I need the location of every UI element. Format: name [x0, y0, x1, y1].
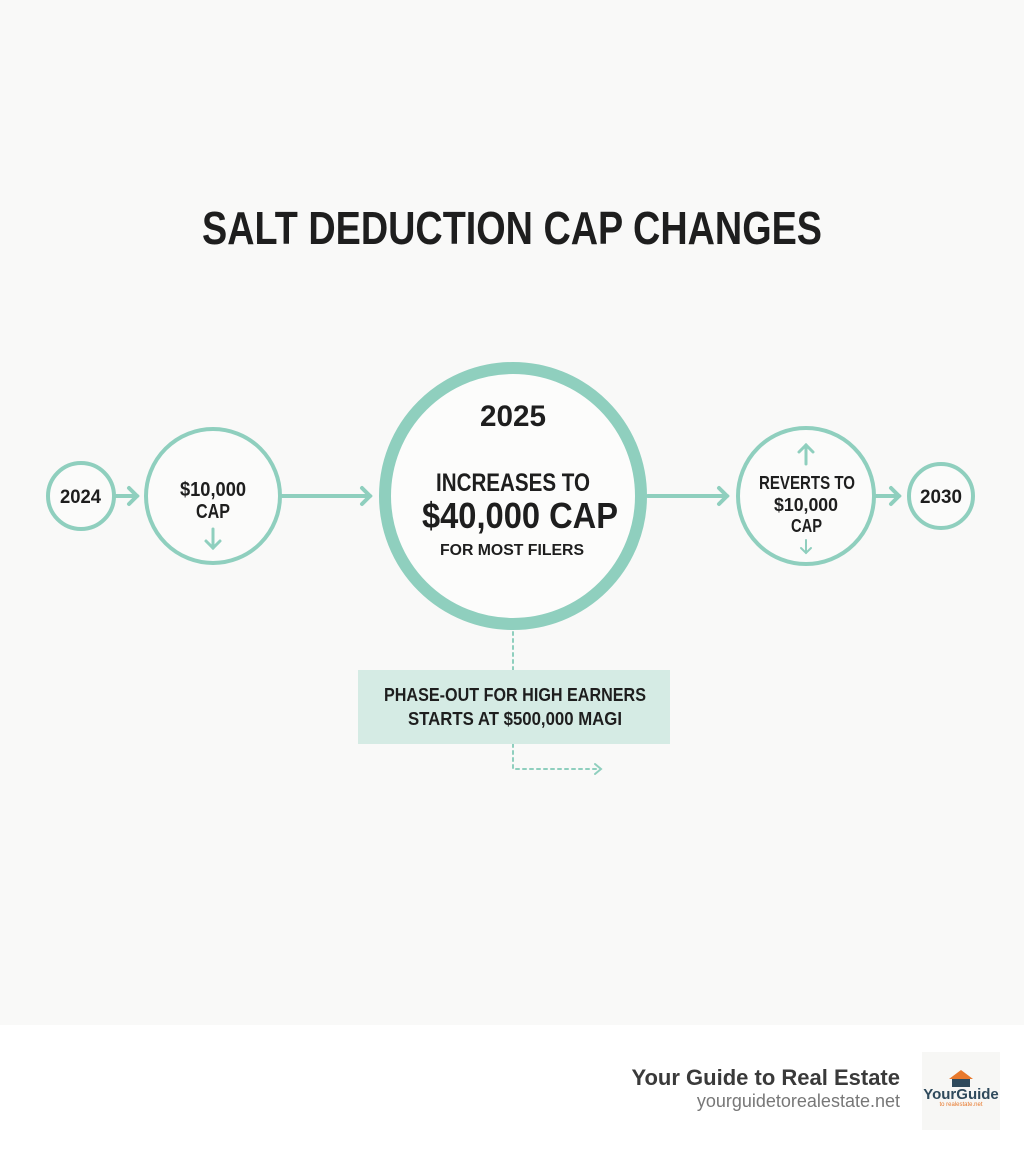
- node: $10,000 cap: $10,000: [180, 479, 246, 501]
- callout: phase-out: STARTS AT $500,000 MAGI: [408, 709, 622, 729]
- callout: phase-out: PHASE-OUT FOR HIGH EARNERS: [384, 685, 646, 705]
- footer text: Your Guide to Real Estate: [631, 1065, 900, 1090]
- node: reverts: $10,000: [774, 495, 838, 515]
- node: $10,000 cap: [146, 429, 280, 563]
- node: 2030: [909, 464, 973, 528]
- node: 2025 big circle: INCREASES TO: [436, 469, 590, 497]
- logo: to realestate.net: [939, 1102, 983, 1108]
- timeline: [48, 368, 973, 774]
- node: 2025 big circle: 2025: [480, 400, 546, 433]
- footer text: yourguidetorealestate.net: [697, 1091, 900, 1111]
- node: 2030: 2030: [920, 487, 962, 508]
- node: reverts: CAP: [791, 516, 822, 536]
- footer: [0, 1025, 1024, 1154]
- dotted connector: [513, 632, 601, 774]
- node: 2025 big circle: [385, 368, 641, 624]
- arrow: to reverts: [648, 488, 727, 504]
- footer text: [631, 1065, 900, 1111]
- callout: phase-out: [358, 670, 670, 744]
- arrow: to 2030: [876, 488, 899, 504]
- node: 2024: 2024: [60, 487, 101, 508]
- logo: [922, 1052, 1000, 1130]
- node: reverts: [738, 428, 874, 564]
- node: 2024: [48, 463, 114, 529]
- node: 2025 big circle: $40,000 CAP: [422, 495, 618, 536]
- arrow: 2024 to 10000: [115, 488, 137, 504]
- node: 2025 big circle: FOR MOST FILERS: [440, 542, 584, 559]
- node: $10,000 cap: CAP: [196, 501, 230, 523]
- logo: YourGuide: [923, 1086, 999, 1103]
- node: reverts: REVERTS TO: [759, 473, 855, 493]
- arrow: to 2025: [281, 488, 370, 504]
- title: SALT DEDUCTION CAP CHANGES: [202, 202, 822, 254]
